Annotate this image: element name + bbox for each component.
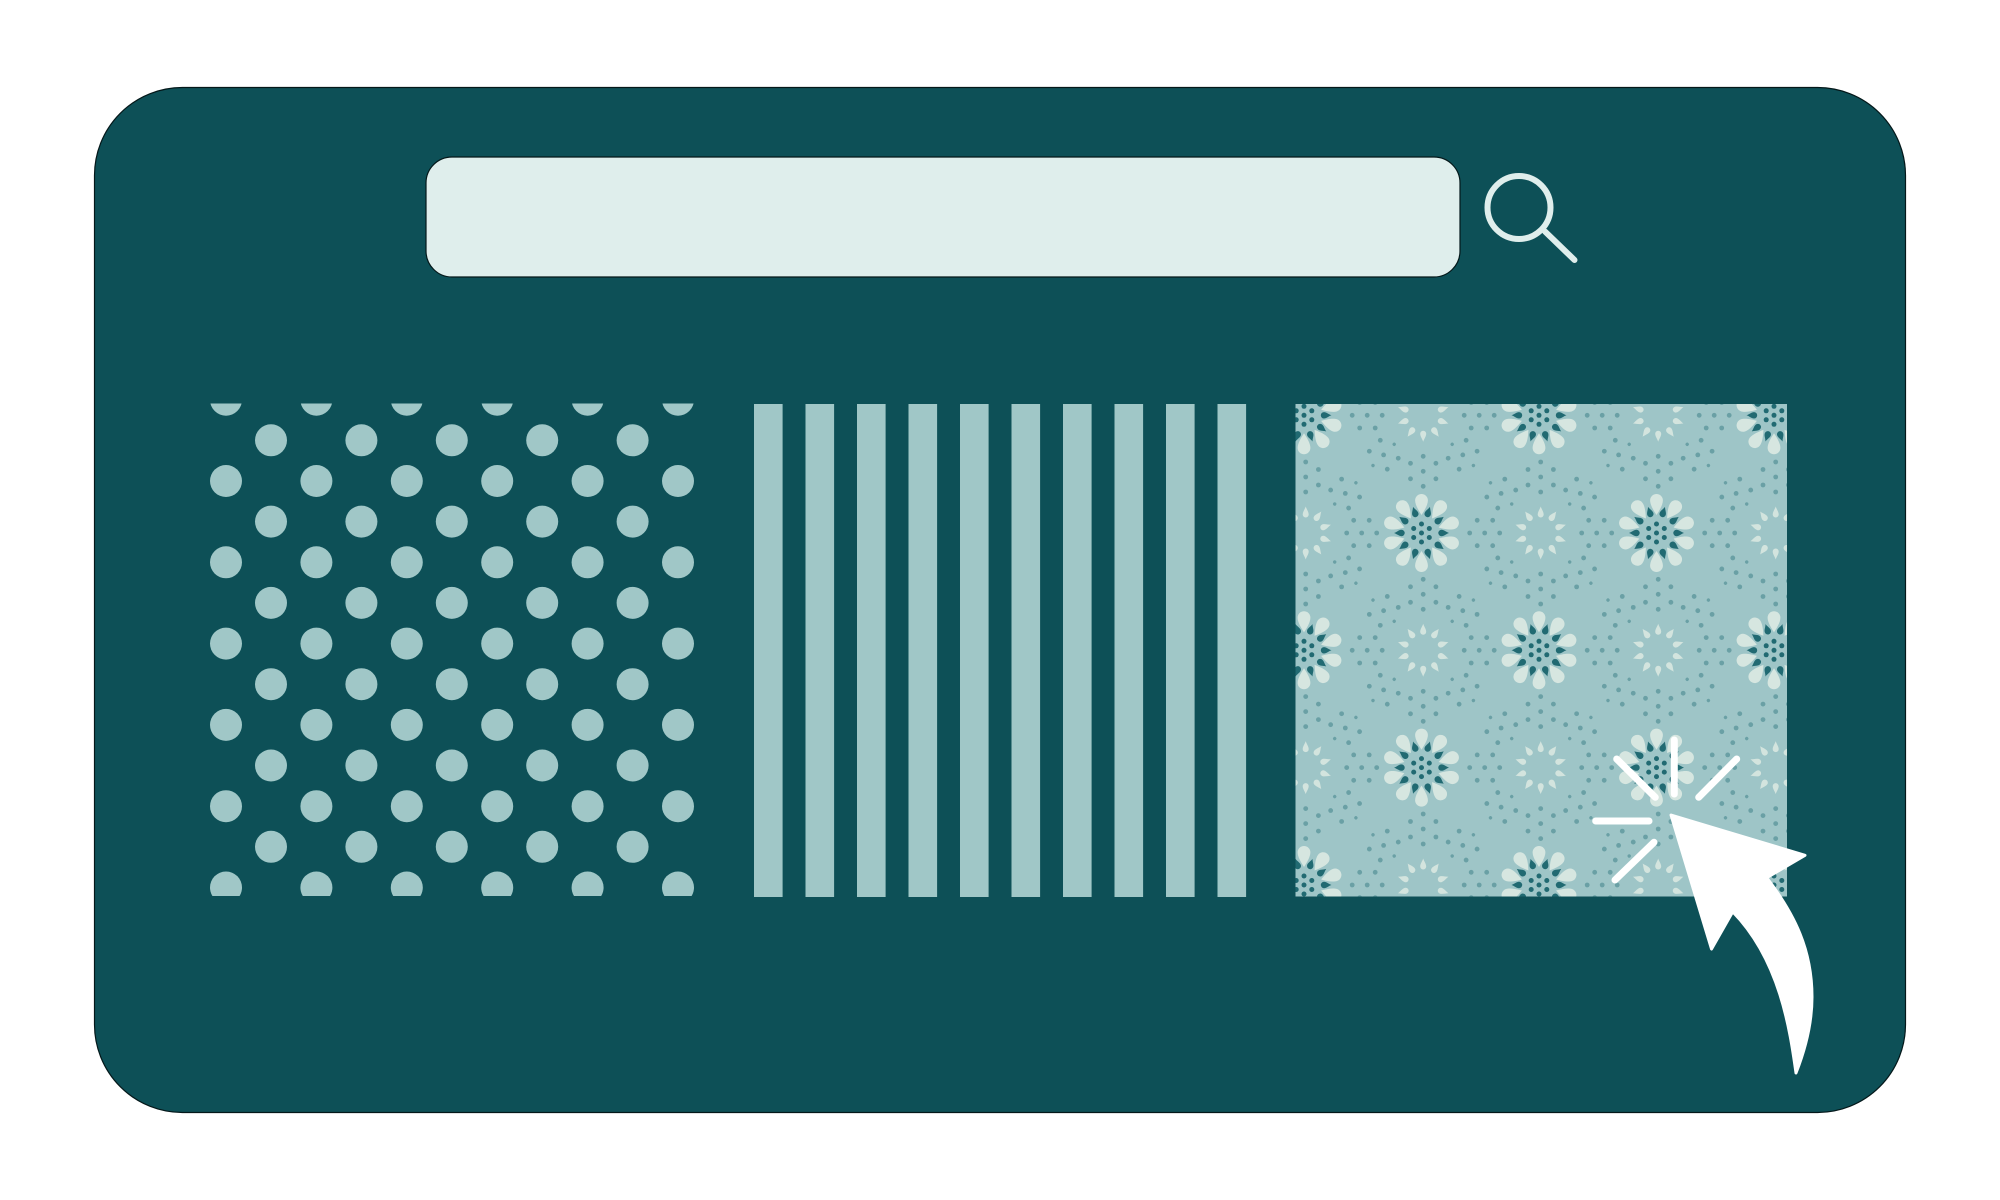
search bar [426, 157, 1460, 277]
infographic: pattern search window [94, 86, 1906, 1114]
arrow: curved cursor pointing at floral swatch [1671, 815, 1812, 1073]
swatch: floral pattern [1296, 404, 1787, 896]
swatch: polka dot pattern [210, 384, 694, 904]
icon: click sparkle lines [1596, 740, 1737, 880]
panel: browser window background [94, 88, 1906, 1112]
icon: magnifying glass [1488, 176, 1574, 260]
swatch: vertical stripes pattern [754, 404, 1246, 897]
